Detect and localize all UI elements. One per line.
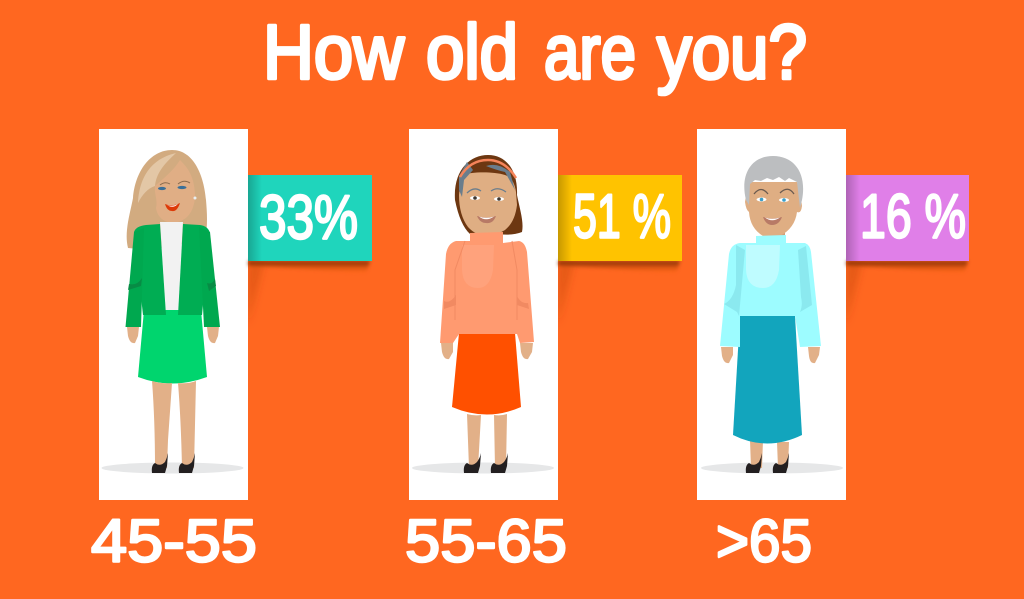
age label: 55-65 xyxy=(405,508,567,574)
card xyxy=(409,129,558,500)
floor shadow xyxy=(701,462,843,474)
shadow below tag xyxy=(558,261,680,274)
title: are xyxy=(544,10,636,96)
tag: 16% xyxy=(846,175,969,261)
tag: 51% xyxy=(558,175,682,261)
shadow below tag xyxy=(846,261,968,274)
shadow beside card xyxy=(558,262,574,325)
card xyxy=(697,129,846,500)
figure: older woman with grey hair and aqua outfit xyxy=(720,156,821,473)
title: old xyxy=(426,10,518,96)
figure: woman with brown hair and coral outfit xyxy=(440,155,534,473)
title: you? xyxy=(657,10,807,96)
panel: 45-55 group xyxy=(91,129,372,574)
age label: >65 xyxy=(716,508,812,574)
title: How xyxy=(263,10,404,96)
shadow beside card xyxy=(248,262,264,325)
shadow beside card xyxy=(846,262,862,325)
card xyxy=(99,129,248,500)
age label: 45-55 xyxy=(91,508,257,574)
tag: 16%: 16 % xyxy=(860,182,966,252)
tag: 33% xyxy=(248,175,372,261)
tag: 51%: 51 % xyxy=(573,182,671,252)
panel: 55-65 group xyxy=(405,129,682,574)
floor shadow xyxy=(102,462,244,474)
shadow below tag xyxy=(248,261,370,274)
figure: woman with blonde hair and green suit xyxy=(126,150,220,473)
title xyxy=(263,10,807,96)
panel: >65 group xyxy=(697,129,969,574)
floor shadow xyxy=(412,462,554,474)
tag: 33%: 33% xyxy=(259,184,358,252)
